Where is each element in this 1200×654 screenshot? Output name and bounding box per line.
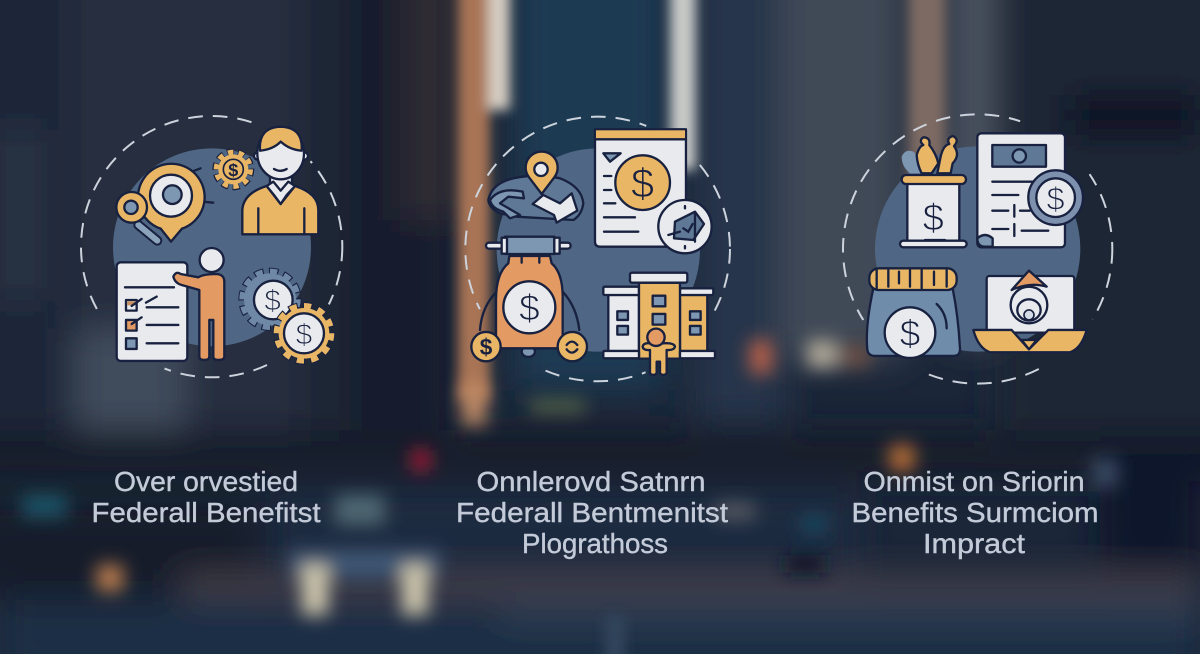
icon: slate dollar gear	[243, 272, 297, 327]
icon: dollar document: $	[631, 160, 654, 207]
icon: flag badge	[658, 200, 712, 253]
heading: third benefit: Onmist on Sriorin	[864, 466, 1084, 497]
heading: second benefit: Onnlerovd Satnrn	[476, 466, 706, 497]
backdrop disk	[875, 146, 1080, 352]
icon: civic building with figure	[603, 273, 715, 375]
dashed ring	[81, 116, 342, 377]
icon: laptop with worker	[973, 271, 1087, 352]
icon: paper with coin: $	[1047, 180, 1065, 217]
icon: money bag on rail: $	[519, 287, 540, 329]
heading: second benefit: Federall Bentmenitst	[456, 497, 728, 528]
icon: jar with dollar sign	[900, 136, 967, 247]
backdrop disk	[497, 148, 700, 352]
panel: second benefit icons	[465, 117, 730, 381]
heading: first benefit: Over orvestied	[114, 466, 298, 497]
dashed ring	[465, 117, 730, 381]
icon: location magnifier	[116, 164, 213, 242]
icon: coin sack: $	[900, 312, 921, 354]
icon: dollar document	[595, 129, 686, 247]
icon: money bag on rail	[471, 237, 587, 361]
icon: small dollar gear	[217, 153, 250, 186]
icon: presenter figure	[173, 248, 224, 360]
heading: first benefit	[92, 466, 321, 528]
icon: coin sack	[867, 268, 960, 358]
panel: third benefit icons	[843, 114, 1112, 384]
heading: first benefit: Federall Benefitst	[92, 497, 321, 528]
icon: map with route arrows	[488, 152, 583, 223]
icon: jar with dollar sign: $	[923, 197, 944, 240]
icon: checklist	[117, 262, 187, 361]
dashed ring	[843, 114, 1112, 384]
icon: slate dollar gear: $	[264, 285, 281, 318]
icon: yellow dollar gear: $	[296, 318, 313, 351]
panel: first benefit icons	[81, 116, 342, 377]
icon: person with sweater	[242, 127, 318, 234]
icon: paper with coin	[977, 133, 1083, 247]
heading: third benefit: Benefits Surmciom	[852, 497, 1098, 528]
heading: second benefit: Plograthoss	[522, 528, 668, 559]
icon: small dollar gear: $	[228, 160, 238, 180]
heading: third benefit	[852, 466, 1098, 559]
icon: yellow dollar gear	[277, 307, 331, 360]
icon: money bag on rail: $	[480, 334, 493, 360]
heading: third benefit: Impract	[923, 528, 1025, 559]
heading: second benefit	[456, 466, 728, 559]
backdrop disk	[113, 148, 311, 346]
